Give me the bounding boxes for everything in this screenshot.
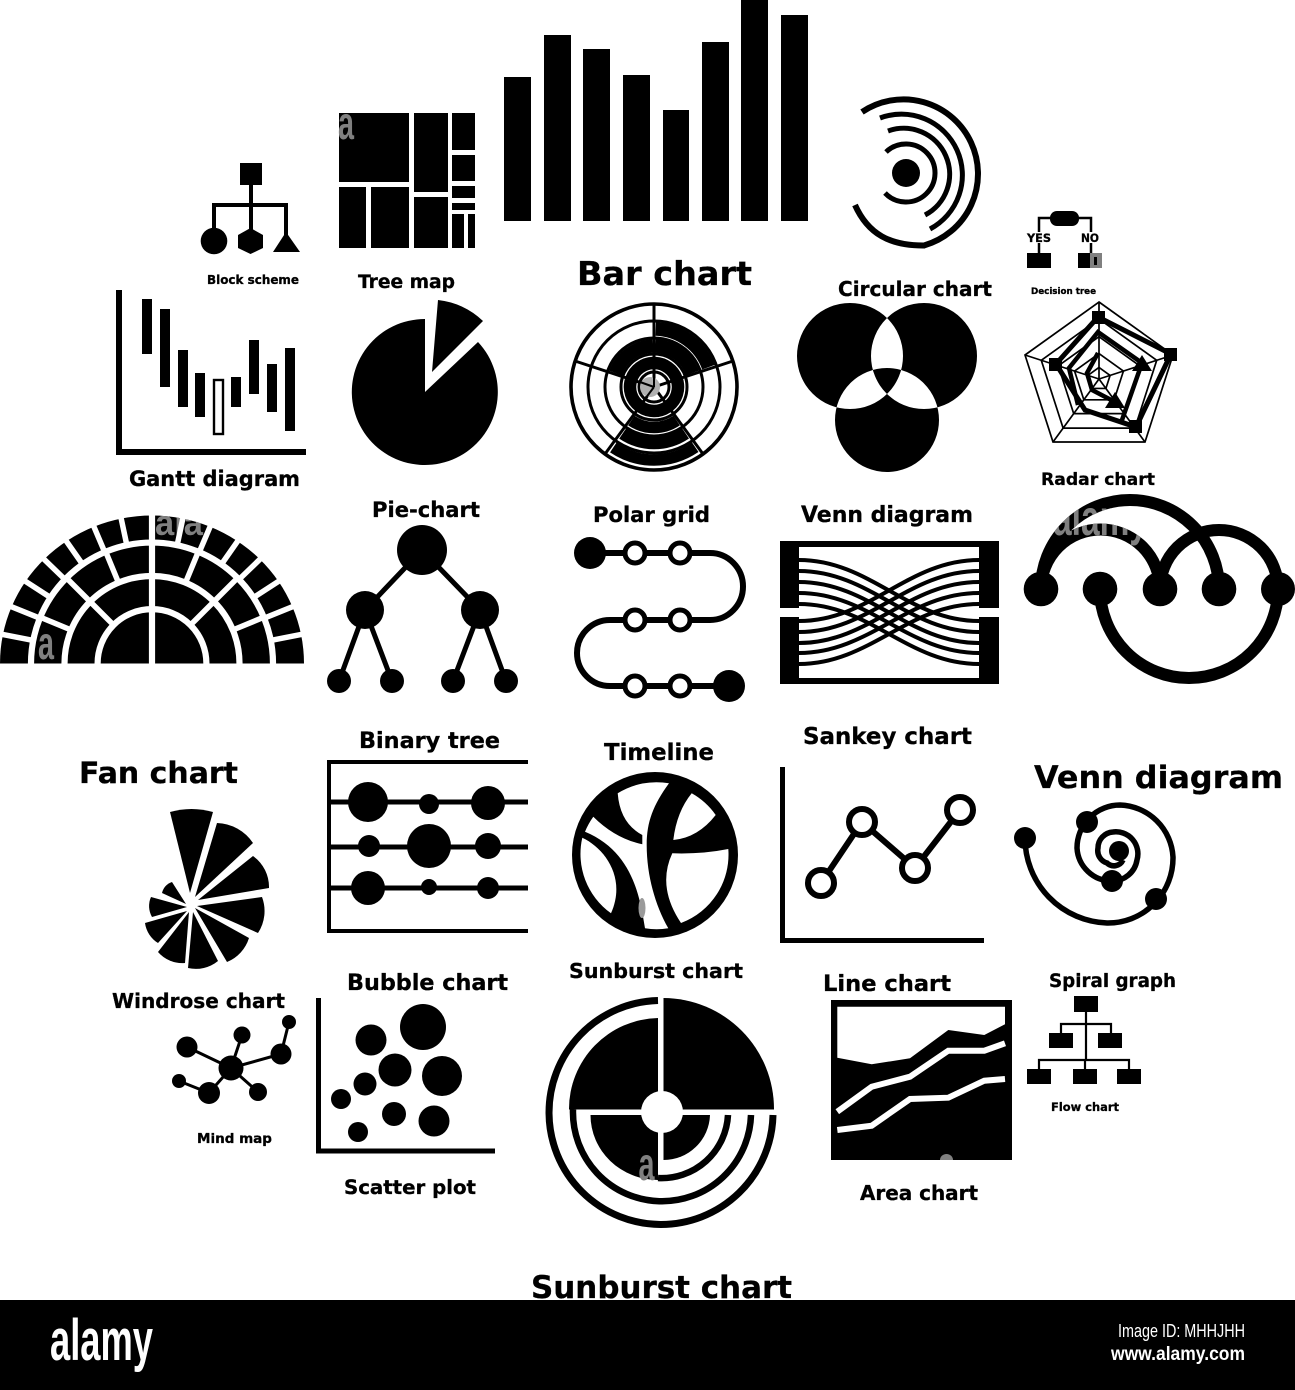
icon: timeline (574, 537, 745, 702)
label: block scheme: Block scheme (207, 273, 299, 287)
label: circular chart: Circular chart (838, 277, 992, 301)
icon: tree map (338, 97, 475, 248)
icon: tree map: a (338, 97, 354, 149)
icon: line chart (782, 767, 984, 940)
icon: decision tree: YES (1026, 231, 1051, 245)
icon: area chart (831, 1000, 1012, 1160)
label: fan chart: Fan chart (79, 756, 238, 790)
icon: fan chart: ala (155, 502, 204, 543)
logo: alamy: alamy (50, 1308, 153, 1373)
label: line chart: Line chart (823, 971, 951, 997)
label: mind map: Mind map (197, 1131, 272, 1147)
icon: decision tree (1026, 211, 1102, 268)
footer: watermark bar (0, 1300, 1295, 1390)
label: area chart: Area chart (860, 1181, 978, 1205)
icon: fan chart (0, 516, 304, 664)
label: pie chart: Pie-chart (372, 498, 480, 522)
icon: radar chart (1025, 302, 1177, 442)
icon: abacus bubble chart (329, 762, 528, 931)
icon: pie chart (352, 300, 498, 465)
label: timeline: Timeline (604, 740, 714, 766)
label: sunburst chart small: Sunburst chart (569, 959, 743, 983)
label: spiral graph: Spiral graph (1049, 971, 1176, 992)
image id: Image ID: MHHJHH (1118, 1321, 1245, 1341)
icon: venn diagram small (797, 303, 977, 472)
icon: sankey chart (780, 541, 999, 684)
icon: gantt diagram (116, 290, 306, 455)
icon: windrose chart (145, 809, 269, 969)
icon: circular chart (855, 99, 978, 246)
icon: spiral graph (1014, 805, 1173, 923)
icon: block scheme (201, 163, 300, 254)
label: tree map: Tree map (358, 272, 455, 293)
icon: decision tree: NO (1081, 231, 1099, 245)
label: windrose chart: Windrose chart (112, 989, 285, 1013)
icon: bar chart (504, 0, 808, 221)
icon: scatter plot (318, 998, 495, 1151)
icon: arc diagram chain (1024, 490, 1295, 678)
label: binary tree: Binary tree (359, 728, 500, 754)
label: bubble chart: Bubble chart (347, 970, 508, 996)
icon: flow chart (1027, 996, 1141, 1084)
label: radar chart: Radar chart (1041, 470, 1155, 490)
icon: mind map (172, 1015, 296, 1104)
label: decision tree: Decision tree (1031, 287, 1096, 297)
label: polar grid: Polar grid (593, 503, 710, 527)
icon: binary tree (327, 525, 518, 693)
icon: fan chart: a (38, 617, 54, 669)
label: bar chart: Bar chart (577, 254, 752, 293)
label: venn diagram large: Venn diagram (1034, 760, 1283, 796)
icon: sunburst chart large: a (638, 1138, 655, 1190)
website: www.alamy.com (1110, 1344, 1245, 1365)
label: venn diagram small: Venn diagram (801, 503, 973, 528)
label: flow chart: Flow chart (1051, 1100, 1119, 1114)
icon: sunburst chart large (549, 998, 774, 1224)
label: gantt diagram: Gantt diagram (129, 467, 300, 491)
label: sunburst chart large: Sunburst chart (531, 1270, 792, 1306)
icon: sunburst circle (572, 772, 738, 938)
icon: arc diagram chain: alamy (1053, 490, 1148, 546)
label: scatter plot: Scatter plot (344, 1176, 476, 1199)
icon: polar grid (553, 286, 755, 488)
label: sankey chart: Sankey chart (803, 722, 972, 750)
